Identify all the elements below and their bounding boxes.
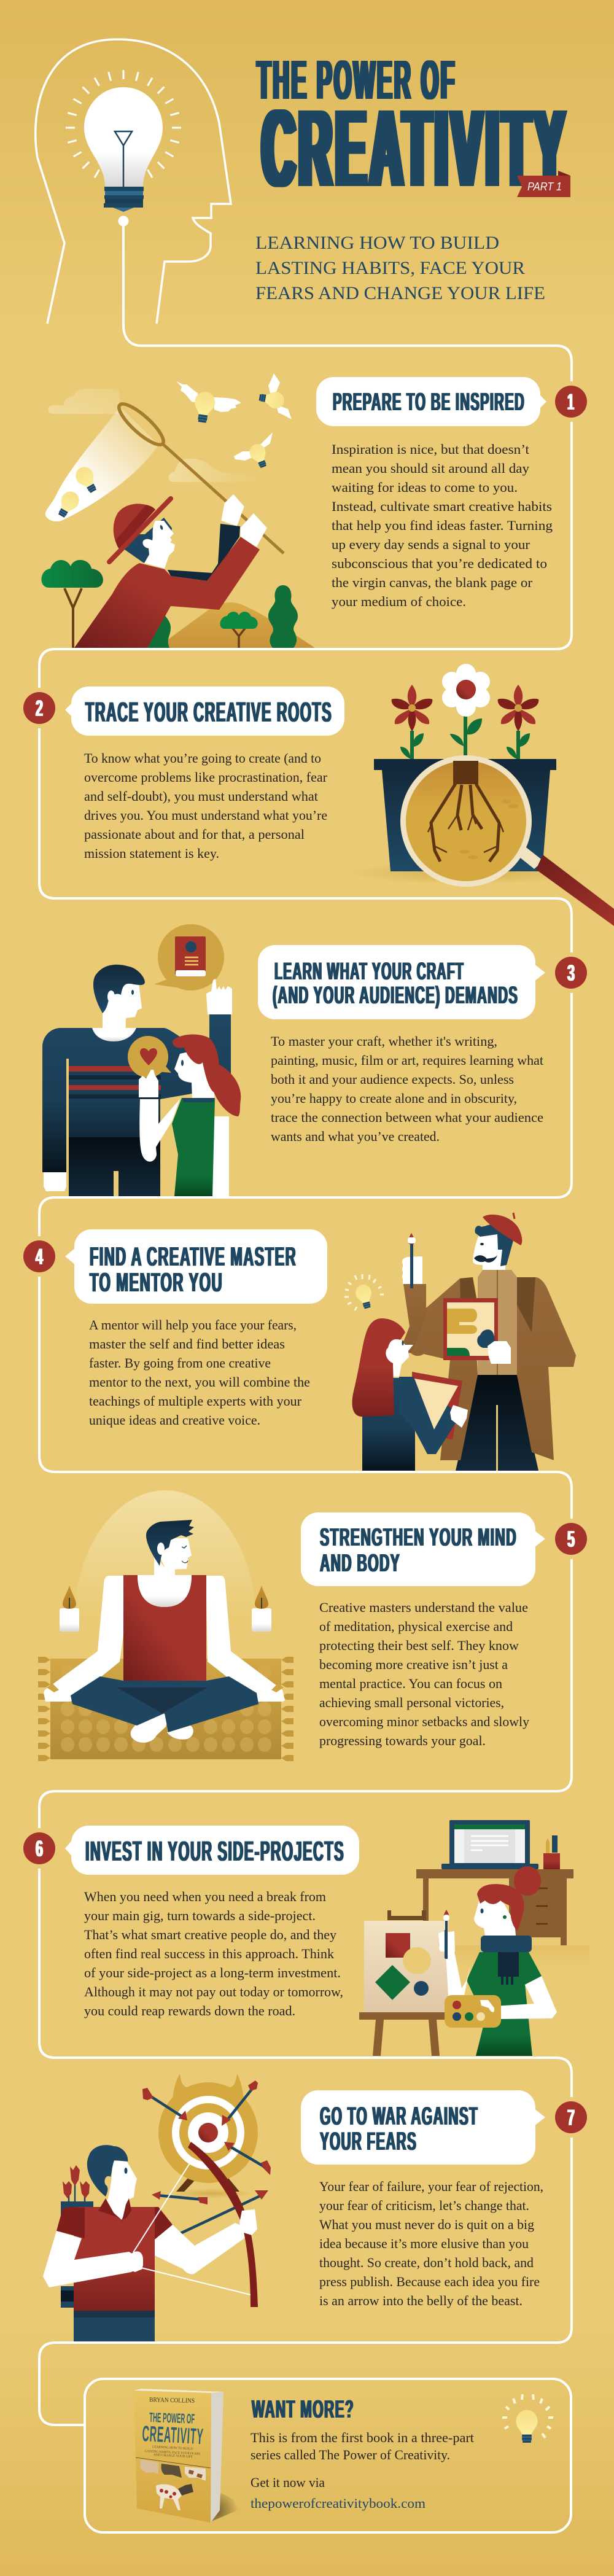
easel and canvas	[359, 1910, 448, 2056]
bushes and trees	[41, 560, 298, 648]
subtitle: LEARNING HOW TO BUILD	[255, 233, 499, 253]
body text: subconscious that you’re dedicated to	[332, 556, 547, 571]
body text: you’re happy to create alone and in obscurity,	[271, 1091, 517, 1106]
torso and legs	[74, 2207, 155, 2311]
subtitle	[255, 233, 545, 303]
heading bubble	[258, 945, 545, 1019]
body text: wants and what you’ve created.	[271, 1129, 440, 1144]
icon: light bulb glass	[84, 87, 163, 187]
body text: Although it may not pay out today or tomorrow,	[84, 1984, 343, 1999]
target stand shade	[169, 2189, 255, 2198]
butterfly net	[45, 399, 284, 553]
heading bubble	[65, 687, 344, 736]
body text: is an arrow into the belly of the beast.	[319, 2293, 523, 2308]
quiver	[61, 2165, 93, 2308]
part 1 ribbon	[517, 171, 570, 197]
header: head outline with light bulb	[36, 39, 231, 324]
number badge 7	[555, 2101, 587, 2133]
body text: This is from the first book in a three-part	[251, 2430, 474, 2445]
panel 7: go to war against your fears	[43, 2074, 587, 2341]
body text: idea because it’s more elusive than you	[319, 2236, 529, 2251]
body text: drives you. You must understand what you’re	[84, 807, 327, 823]
body text: both it and your audience expects. So, unless	[271, 1072, 514, 1087]
body text: mentor to the next, you will combine the	[89, 1374, 310, 1390]
heading bubble	[301, 2090, 545, 2165]
small idea bulb with rays	[344, 1274, 384, 1310]
body text: of meditation, physical exercise and	[319, 1619, 513, 1634]
number badge 7: 7	[567, 2105, 575, 2130]
number badge 6: 6	[36, 1836, 43, 1861]
body text	[271, 1033, 543, 1144]
man with hat	[74, 496, 266, 648]
body text: That’s what smart creative people do, and they	[84, 1927, 336, 1942]
body text: Creative masters understand the value	[319, 1600, 528, 1615]
number badge 6	[23, 1832, 55, 1864]
body text: overcoming minor setbacks and slowly	[319, 1714, 529, 1729]
book cover mockup: BRYAN COLLINS	[149, 2397, 195, 2405]
body text: overcome problems like procrastination, fear	[84, 769, 328, 785]
halo	[74, 1490, 256, 1621]
heading bubble	[301, 1512, 545, 1586]
subtitle: FEARS AND CHANGE YOUR LIFE	[255, 283, 545, 303]
icon: glowing light bulb	[502, 2394, 553, 2443]
pot	[374, 759, 556, 871]
winged light bulbs	[176, 373, 292, 470]
body text: up every day sends a signal to your	[332, 537, 530, 552]
body text: Inspiration is nice, but that doesn’t	[332, 442, 529, 457]
candles	[60, 1586, 271, 1632]
number badge 3: 3	[567, 960, 575, 986]
body text	[332, 442, 553, 609]
number badge 3	[555, 957, 587, 989]
number badge 5: 5	[567, 1527, 575, 1552]
icon: head silhouette outline	[36, 39, 231, 324]
body text	[319, 1600, 529, 1748]
flowers	[389, 664, 541, 759]
mentor	[402, 1213, 576, 1471]
body text: unique ideas and creative voice.	[89, 1412, 260, 1428]
target	[158, 2074, 258, 2192]
body text: master the self and find better ideas	[89, 1336, 285, 1352]
panel 5: strengthen your mind and body	[38, 1490, 587, 1761]
book cover mockup: CREATIVITY	[142, 2421, 204, 2449]
magnifying glass handle	[519, 847, 614, 926]
body text: A mentor will help you face your fears,	[89, 1317, 297, 1333]
body text: Instead, cultivate smart creative habits	[332, 499, 552, 514]
body text: When you need when you need a break from	[84, 1889, 326, 1904]
body text: What you must never do is quit on a big	[319, 2217, 534, 2232]
body text: mental practice. You can focus on	[319, 1676, 502, 1691]
number badge 4	[23, 1240, 55, 1272]
arrow heads and fletchings	[142, 2080, 271, 2204]
number badge 2: 2	[36, 696, 43, 721]
head	[104, 2160, 137, 2220]
body text: thepowerofcreativitybook.com	[251, 2496, 426, 2511]
panel: want more call to action	[85, 2379, 571, 2532]
body text: of your side-project as a long-term investment.	[84, 1965, 341, 1980]
bow strings	[133, 2163, 251, 2295]
title	[257, 50, 570, 209]
body text: your main gig, turn towards a side-project.	[84, 1908, 316, 1923]
speech bubble with book	[154, 924, 224, 990]
painter woman	[438, 1866, 557, 2056]
body text: painting, music, film or art, requires learning what	[271, 1053, 543, 1068]
body text: progressing towards your goal.	[319, 1733, 486, 1748]
subtitle: LASTING HABITS, FACE YOUR	[255, 258, 525, 278]
pot shadow	[350, 862, 583, 884]
heading bubble: TRACE YOUR CREATIVE ROOTS	[85, 696, 332, 728]
desk with drawers	[416, 1869, 573, 1945]
body text: that help you find ideas faster. Turning	[332, 518, 553, 533]
laptop	[441, 1820, 538, 1869]
clouds	[48, 389, 258, 482]
panel 1: prepare to be inspired	[41, 373, 587, 648]
icon: light bulb rays	[66, 70, 181, 177]
body text: teachings of multiple experts with your	[89, 1393, 302, 1409]
body text: To master your craft, whether it's writing,	[271, 1033, 497, 1049]
body text: often find real success in this approach. Think	[84, 1946, 334, 1961]
body text	[84, 750, 328, 861]
body text: series called The Power of Creativity.	[251, 2447, 450, 2462]
heading bubble: GO TO WAR AGAINST	[320, 2101, 478, 2130]
body text: achieving small personal victories,	[319, 1695, 504, 1710]
body text	[319, 2179, 543, 2308]
book cover mockup	[134, 2389, 239, 2523]
body text	[84, 1889, 343, 2018]
floor shade	[454, 1945, 589, 1970]
pencil cup	[543, 1835, 560, 1869]
icon: filament	[115, 131, 132, 187]
body text: and self-doubt), you must understand what	[84, 788, 318, 804]
body text	[251, 2430, 474, 2511]
body text: mean you should sit around all day	[332, 461, 529, 476]
body text: trace the connection between what your audience	[271, 1110, 543, 1125]
bow	[188, 2142, 258, 2307]
body text: passionate about and for that, a personal	[84, 827, 305, 842]
meditating figure	[44, 1520, 285, 1743]
heading bubble: TO MENTOR YOU	[90, 1267, 223, 1298]
number badge 2	[23, 692, 55, 724]
body text: the virgin canvas, the blank page or	[332, 575, 533, 590]
rug	[38, 1657, 293, 1761]
number badge 1: 1	[567, 389, 574, 414]
man raising finger	[42, 965, 232, 1196]
body text: faster. By going from one creative	[89, 1355, 271, 1371]
illustration: man and woman with speech bubbles	[42, 924, 241, 1196]
number badge 4: 4	[36, 1244, 43, 1269]
heading bubble	[316, 377, 546, 426]
callout frame	[85, 2379, 571, 2532]
body text: mission statement is key.	[84, 846, 219, 861]
panel 6: invest in your side-projects	[23, 1820, 589, 2056]
magnifying lens with roots	[400, 755, 532, 887]
icon: bulb screw base	[104, 187, 144, 212]
body text: your medium of choice.	[332, 594, 466, 609]
heading bubble: YOUR FEARS	[320, 2127, 417, 2155]
archer	[43, 2142, 258, 2341]
heading want more: WANT MORE?	[252, 2395, 354, 2423]
panel 2: trace your creative roots	[23, 664, 614, 926]
hand on bow	[239, 2209, 257, 2235]
body text: To know what you’re going to create (and to	[84, 750, 321, 766]
body text: thought. So create, don’t hold back, and	[319, 2255, 534, 2270]
part 1 ribbon: PART 1	[527, 181, 562, 193]
body text: press publish. Because each idea you fire	[319, 2274, 540, 2289]
heading bubble: AND BODY	[320, 1549, 400, 1577]
timeline connector line	[39, 226, 572, 2425]
heading bubble: FIND A CREATIVE MASTER	[90, 1242, 297, 1272]
student	[352, 1318, 468, 1471]
panel 4: find a creative master	[23, 1213, 576, 1471]
illustration: meditating man	[38, 1490, 293, 1761]
arms	[155, 2223, 255, 2274]
body text: Get it now via	[251, 2475, 325, 2490]
body text: becoming more creative isn’t just a	[319, 1657, 508, 1672]
panel 3: learn what your craft demands	[42, 924, 587, 1196]
illustration: painter at easel with desk	[359, 1820, 589, 2056]
heading bubble	[65, 1229, 327, 1304]
woman raising finger	[139, 1035, 241, 1196]
number badge 5	[555, 1523, 587, 1555]
hill	[157, 602, 315, 648]
icon: stem dot	[118, 216, 129, 226]
heading bubble	[65, 1826, 359, 1875]
arrows	[140, 2088, 266, 2252]
number badge 1	[555, 386, 587, 418]
book cover mockup: AND CHANGE YOUR LIFE	[154, 2453, 193, 2459]
book cover mockup: LASTING HABITS, FACE YOUR FEARS	[145, 2450, 200, 2456]
speech bubble with heart	[128, 1036, 171, 1078]
illustration: flower pot under magnifying glass	[350, 664, 614, 926]
illustration: mentor painter and student	[344, 1213, 576, 1471]
body text	[89, 1317, 310, 1428]
book cover mockup: THE POWER OF	[149, 2410, 195, 2427]
illustration: archer and target	[43, 2074, 271, 2341]
body text: protecting their best self. They know	[319, 1638, 519, 1653]
illustration: catching winged ideas with a net	[41, 373, 315, 648]
body text: your fear of criticism, let’s change that.	[319, 2198, 529, 2213]
body text: Your fear of failure, your fear of rejection,	[319, 2179, 543, 2194]
heading bubble: INVEST IN YOUR SIDE-PROJECTS	[85, 1835, 344, 1867]
book cover mockup: LEARNING HOW TO BUILD	[152, 2445, 193, 2451]
body text: you could reap rewards down the road.	[84, 2003, 295, 2018]
body text: waiting for ideas to come to you.	[332, 480, 518, 495]
